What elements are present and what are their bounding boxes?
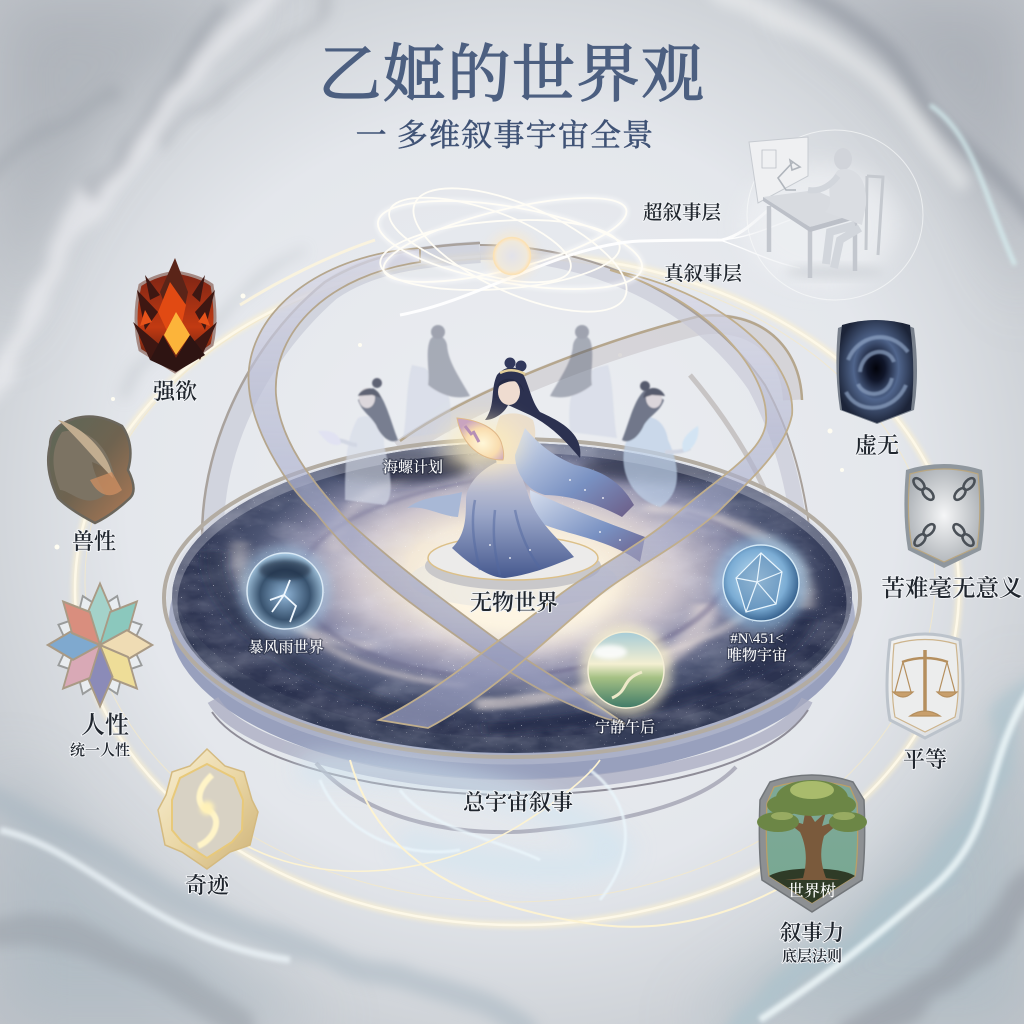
labels: left themes: 兽性 — [72, 529, 116, 554]
labels: left themes: 人性 — [81, 712, 129, 739]
lower rings — [212, 700, 808, 832]
labels: central worlds: 海螺计划 — [383, 458, 443, 476]
ghost figure: back right — [550, 325, 617, 438]
labels: central worlds: 宁静午后 — [595, 719, 655, 736]
labels: right themes — [780, 433, 1022, 965]
icon: beast stone — [48, 416, 134, 523]
icon: equality scales — [887, 634, 963, 738]
pedestal — [409, 536, 617, 608]
icon: broken chains — [904, 464, 984, 568]
central figure: Otohime with glowing shell — [407, 358, 645, 578]
ghost figure: front right with shell — [622, 381, 698, 507]
labels: right themes: 虚无 — [855, 433, 899, 458]
planet: storm world — [239, 545, 331, 637]
planet: quiet afternoon — [580, 624, 672, 716]
labels: layers: 真叙事层 — [664, 263, 742, 285]
labels: right themes: 苦难毫无意义 — [882, 574, 1022, 602]
icon: miracle gold shield — [158, 749, 258, 869]
label: tree name: 世界树 — [788, 881, 836, 900]
labels: layers: 超叙事层 — [643, 201, 721, 224]
labels: left themes — [70, 379, 230, 898]
labels: left themes: 统一人性 — [70, 741, 130, 759]
icon: humanity crystal star — [48, 584, 152, 706]
labels: left themes: 奇迹 — [185, 873, 230, 898]
title: 乙姬的世界观 — [318, 40, 706, 110]
labels: left themes: 强欲 — [153, 379, 197, 404]
labels: central worlds: 总宇宙叙事 — [463, 790, 573, 815]
icon: desire flame shield — [133, 258, 217, 372]
subtitle: 一 多维叙事宇宙全景 — [356, 118, 654, 153]
lower golden threads and mist — [245, 760, 850, 927]
front right band — [379, 270, 792, 728]
sparkles — [54, 294, 844, 550]
labels: central worlds: #N\451< — [730, 631, 784, 647]
icon: void black hole — [836, 320, 917, 424]
panel: creator at desk — [742, 130, 923, 300]
icon: world tree — [757, 775, 867, 912]
labels: central worlds — [248, 458, 787, 815]
labels: central worlds: 暴风雨世界 — [248, 639, 324, 656]
ghost figure: back left — [403, 325, 470, 438]
labels: layers — [643, 201, 742, 285]
panel: galaxy disk — [164, 406, 860, 780]
front left band — [249, 248, 625, 724]
labels: central worlds: 唯物宇宙 — [727, 646, 787, 664]
golden orbit ring — [75, 255, 959, 925]
labels: central worlds: 无物世界 — [470, 590, 558, 615]
labels: right themes: 叙事力 — [780, 921, 844, 945]
labels: right themes: 底层法则 — [782, 947, 842, 965]
rear translucent bands — [202, 243, 812, 566]
labels: right themes: 平等 — [903, 747, 947, 772]
ghost figure: front left with shell — [318, 378, 398, 505]
planet: crystal universe — [714, 536, 808, 630]
orbit wisps and central orb — [240, 163, 800, 337]
